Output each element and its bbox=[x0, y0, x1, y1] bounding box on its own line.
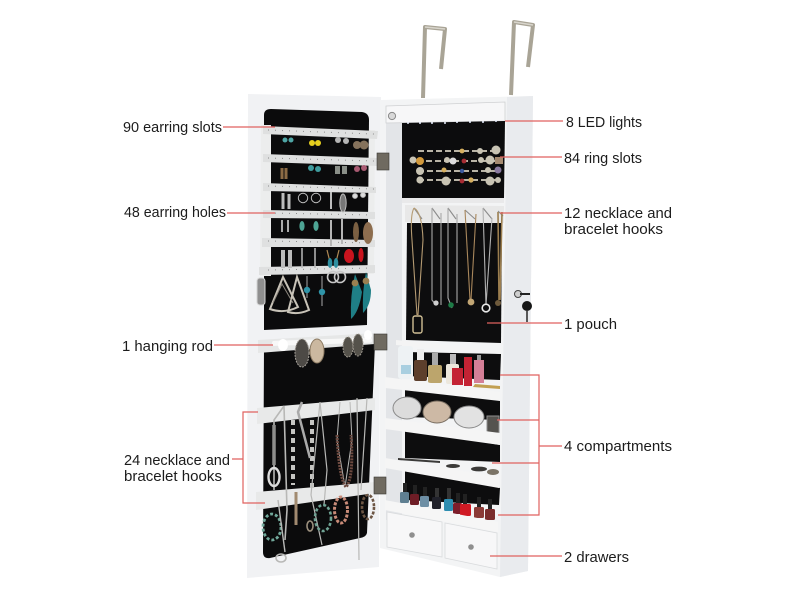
earrings: row 2 bbox=[282, 165, 367, 179]
earrings: large triangles, crosses, hoops, feathers bbox=[270, 272, 371, 319]
callout: 8 LED lights: 8 LED lights bbox=[566, 115, 642, 131]
callout: 2 drawers: 2 drawers bbox=[564, 550, 629, 566]
shelf 1 bbox=[385, 377, 500, 401]
bracelets on rod bbox=[295, 334, 363, 367]
shelf 3 bbox=[385, 458, 499, 488]
callout: 1 pouch bbox=[487, 317, 617, 333]
callout: 12 necklace and bracelet hooks: 12 necklace and bbox=[564, 206, 672, 222]
necklaces and hooks bbox=[411, 208, 503, 333]
bottles and lipsticks bbox=[398, 346, 500, 389]
panel: pouch bbox=[406, 223, 502, 343]
panel: open door bbox=[247, 94, 381, 578]
earrings: row 5 bbox=[283, 248, 364, 268]
callout: 24 necklace and bracelet hooks: bracelet hooks bbox=[124, 469, 222, 485]
icon: over-door hangers bbox=[423, 22, 533, 98]
callout: 4 compartments bbox=[492, 375, 672, 515]
flat cosmetics bbox=[398, 458, 499, 475]
shelf 4 bbox=[385, 500, 498, 532]
shelf 2 bbox=[385, 418, 500, 445]
earrings: row 3 bbox=[283, 192, 365, 212]
earrings: row 4 bbox=[282, 219, 373, 246]
panel: ring section bbox=[402, 121, 505, 198]
panel: cabinet body bbox=[374, 96, 533, 577]
lower door hook bars bbox=[256, 398, 375, 510]
earring rack: vertical rails bbox=[260, 125, 375, 276]
callout: 48 earring holes: 48 earring holes bbox=[124, 205, 226, 221]
LED lights bbox=[407, 120, 497, 124]
panel: cosmetics compartments bbox=[385, 340, 501, 532]
callout: 24 necklace and bracelet hooks: 24 necklace and bbox=[124, 453, 230, 469]
callout: 24 necklace and bracelet hooks bbox=[124, 412, 265, 503]
callout: 8 LED lights bbox=[505, 115, 642, 131]
callout: 12 necklace and bracelet hooks: bracelet hooks bbox=[564, 222, 663, 238]
earrings: row 1 bbox=[282, 137, 368, 150]
panel: two drawers with knobs bbox=[387, 512, 497, 569]
compacts and perfume bbox=[393, 397, 499, 433]
callout: 2 drawers bbox=[490, 550, 629, 566]
earring rack: six slotted bars bbox=[259, 126, 378, 275]
callout: 4 compartments: 4 compartments bbox=[564, 439, 672, 455]
top shelf bbox=[396, 340, 501, 354]
callout: 1 hanging rod: 1 hanging rod bbox=[122, 339, 213, 355]
rings: four rows bbox=[410, 146, 503, 186]
icon: door clasp bbox=[257, 278, 265, 305]
shelf below rings bbox=[402, 198, 504, 203]
hanging rod bar bbox=[258, 330, 375, 353]
icon: door hinges bbox=[374, 153, 389, 494]
callout: 84 ring slots: 84 ring slots bbox=[564, 151, 642, 167]
product photo: jewelry cabinet bbox=[122, 22, 672, 578]
nail polish bottles bbox=[400, 483, 495, 520]
icon: lock and key bbox=[514, 290, 532, 322]
mirror top cap and lock screw bbox=[386, 102, 505, 123]
callout: 12 necklace and bracelet hooks bbox=[500, 206, 672, 238]
earring rack: slot holes bbox=[268, 130, 374, 270]
callout: 90 earring slots: 90 earring slots bbox=[123, 120, 222, 136]
necklace hook bar bbox=[405, 205, 504, 223]
callout: 1 pouch: 1 pouch bbox=[564, 317, 617, 333]
necklaces on door bbox=[263, 398, 374, 562]
